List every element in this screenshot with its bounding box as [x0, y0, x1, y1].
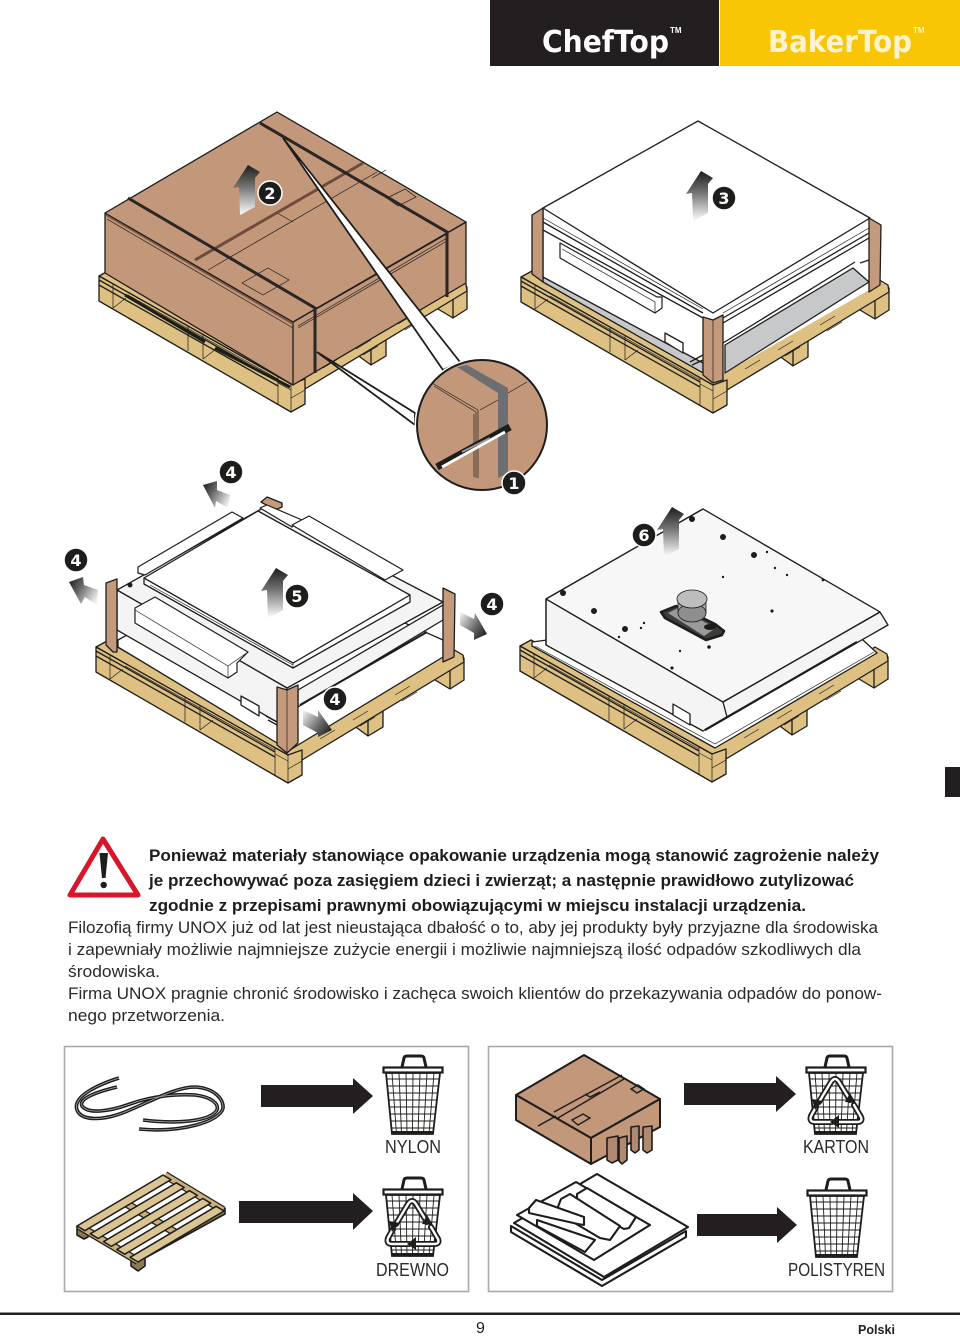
arrow: wood to bin	[239, 1193, 373, 1230]
badge 4 front	[323, 687, 347, 711]
arrow: lift appliance	[657, 507, 684, 557]
header: ChefTop tab: ChefTop	[542, 25, 669, 60]
body text: Filozofią firmy UNOX już od lat jest nieustająca dbałość o to, aby jej produkty były przyjazne dla środowiska	[68, 918, 879, 937]
header: ChefTop tab: TM	[670, 26, 682, 35]
body text: nego przetworzenia.	[68, 1006, 225, 1025]
badge 4 back	[219, 460, 243, 484]
badge 2	[258, 181, 282, 205]
body text: środowiska.	[68, 962, 160, 981]
badge 1: 1	[508, 474, 520, 493]
header: ChefTop tab	[490, 0, 719, 66]
icon: appliance top vent	[661, 590, 724, 640]
badge 4 front: 4	[329, 690, 341, 709]
arrow: lift board	[261, 568, 288, 618]
header: BakerTop tab: BakerTop	[768, 25, 912, 60]
body text: Firma UNOX pragnie chronić środowisko i zachęca swoich klientów do przekazywania odpadów do ponow-	[68, 984, 882, 1003]
badge 4 left	[64, 548, 88, 572]
badge 1	[502, 471, 526, 495]
body text: i zapewniały możliwie najmniejsze zużycie energii i możliwie najmniejszą ilość odpadów szkodliwych dla	[68, 940, 862, 959]
badge 4 right: 4	[486, 595, 498, 614]
arrow: left post	[69, 577, 98, 605]
panel: corner posts and foam, steps 4 and 5	[96, 497, 464, 783]
panel: nylon and wood recycling	[64, 1046, 468, 1292]
badge 2: 2	[264, 184, 276, 203]
label: wood: DREWNO	[376, 1260, 449, 1280]
arrow: lift carton	[233, 165, 260, 215]
header: BakerTop tab: TM	[913, 26, 925, 35]
body text	[68, 918, 882, 1025]
arrow: foam to bin	[697, 1207, 797, 1243]
badge 5	[285, 584, 309, 608]
panel: cardboard and polystyrene recycling	[488, 1046, 892, 1292]
warning text	[148, 846, 880, 915]
badge 4 right	[480, 592, 504, 616]
callout: cutting the strap detail	[417, 360, 547, 490]
badge 6	[632, 523, 656, 547]
arrow: right post	[460, 612, 487, 640]
arrow: carton to bin	[684, 1076, 796, 1112]
label: polystyrene: POLISTYREN	[788, 1260, 885, 1280]
badge 6: 6	[638, 526, 650, 545]
panel: lifting the appliance, step 6	[520, 509, 888, 782]
badge 3	[712, 186, 736, 210]
badge 4 back: 4	[225, 463, 237, 482]
header: BakerTop tab	[720, 0, 960, 66]
warning text: Ponieważ materiały stanowiące opakowanie urządzenia mogą stanowić zagrożenie należy	[149, 846, 880, 865]
icon: small pallet	[77, 1175, 225, 1271]
icon: polystyrene foam pieces	[511, 1174, 688, 1286]
arrow: front post	[303, 710, 332, 737]
icon: bin for polystyrene	[808, 1179, 866, 1257]
arrow: nylon to bin	[261, 1078, 373, 1114]
warning text: zgodnie z przepisami prawnymi obowiązującymi w miejscu instalacji urządzenia.	[149, 896, 806, 915]
badge 3: 3	[718, 189, 730, 208]
icon: warning triangle	[70, 839, 138, 895]
label: nylon: NYLON	[385, 1137, 441, 1157]
badge 4 left: 4	[70, 551, 82, 570]
icon: bin for carton, recyclable	[806, 1056, 866, 1134]
label: carton: KARTON	[803, 1137, 869, 1157]
badge 5: 5	[291, 587, 303, 606]
arrow: back post	[203, 481, 230, 508]
warning text: je przechowywać poza zasięgiem dzieci i zwierząt; a następnie prawidłowo zutylizować	[148, 871, 854, 890]
icon: nylon strap	[76, 1078, 223, 1130]
panel: cover removed, step 3	[521, 121, 889, 413]
icon: bin for nylon	[384, 1056, 442, 1134]
callout: zoom wedges	[283, 138, 460, 425]
icon: flattened carton with posts	[516, 1055, 660, 1164]
side marker	[945, 767, 960, 797]
footer rule	[0, 1312, 960, 1315]
panel: carton on pallet, step 1 and 2	[99, 112, 547, 490]
icon: bin for wood, recyclable	[384, 1178, 442, 1256]
arrow: lift cover	[686, 171, 713, 221]
